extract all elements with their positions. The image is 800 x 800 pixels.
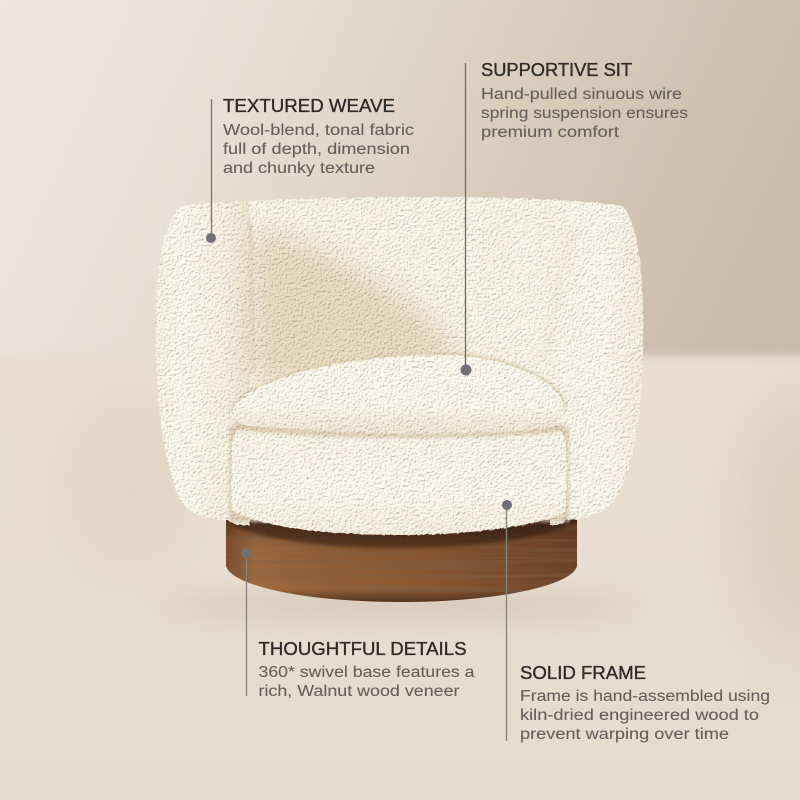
description: and chunky texture bbox=[223, 160, 375, 177]
seat cushion bbox=[233, 355, 564, 432]
description: rich, Walnut wood veneer bbox=[258, 683, 460, 700]
description: Wool-blend, tonal fabric bbox=[223, 122, 414, 139]
heading: TEXTURED WEAVE bbox=[223, 96, 395, 116]
description: full of depth, dimension bbox=[223, 141, 410, 158]
callout: textured weave bbox=[206, 96, 414, 243]
heading: SOLID FRAME bbox=[520, 663, 646, 683]
description: prevent warping over time bbox=[520, 726, 729, 743]
base shadow on chair bbox=[229, 426, 569, 522]
description bbox=[520, 688, 770, 743]
callout: thoughtful details bbox=[241, 548, 475, 700]
heading: THOUGHTFUL DETAILS bbox=[258, 639, 466, 659]
leader line and dot bbox=[502, 500, 512, 741]
seat shadow bbox=[236, 420, 562, 438]
description: Frame is hand-assembled using bbox=[520, 688, 770, 705]
description bbox=[223, 122, 414, 177]
heading: SUPPORTIVE SIT bbox=[481, 60, 632, 80]
wood swivel base bbox=[226, 510, 577, 602]
leader line and dot bbox=[241, 548, 251, 696]
description: premium comfort bbox=[481, 124, 620, 141]
leader line and dot bbox=[206, 99, 216, 243]
description bbox=[481, 86, 688, 141]
description: 360* swivel base features a bbox=[258, 664, 475, 681]
description bbox=[258, 664, 475, 700]
leader line and dot bbox=[460, 63, 472, 376]
front cushion base bbox=[231, 428, 566, 535]
callout: supportive sit bbox=[460, 60, 688, 376]
callout: solid frame bbox=[502, 500, 770, 743]
seat top shadow bbox=[231, 352, 566, 412]
description: Hand-pulled sinuous wire bbox=[481, 86, 682, 103]
boucle upholstery bbox=[150, 190, 650, 540]
chair illustration bbox=[150, 190, 650, 602]
chair back and arms bbox=[156, 197, 643, 520]
description: kiln-dried engineered wood to bbox=[520, 707, 759, 724]
description: spring suspension ensures bbox=[481, 105, 688, 122]
